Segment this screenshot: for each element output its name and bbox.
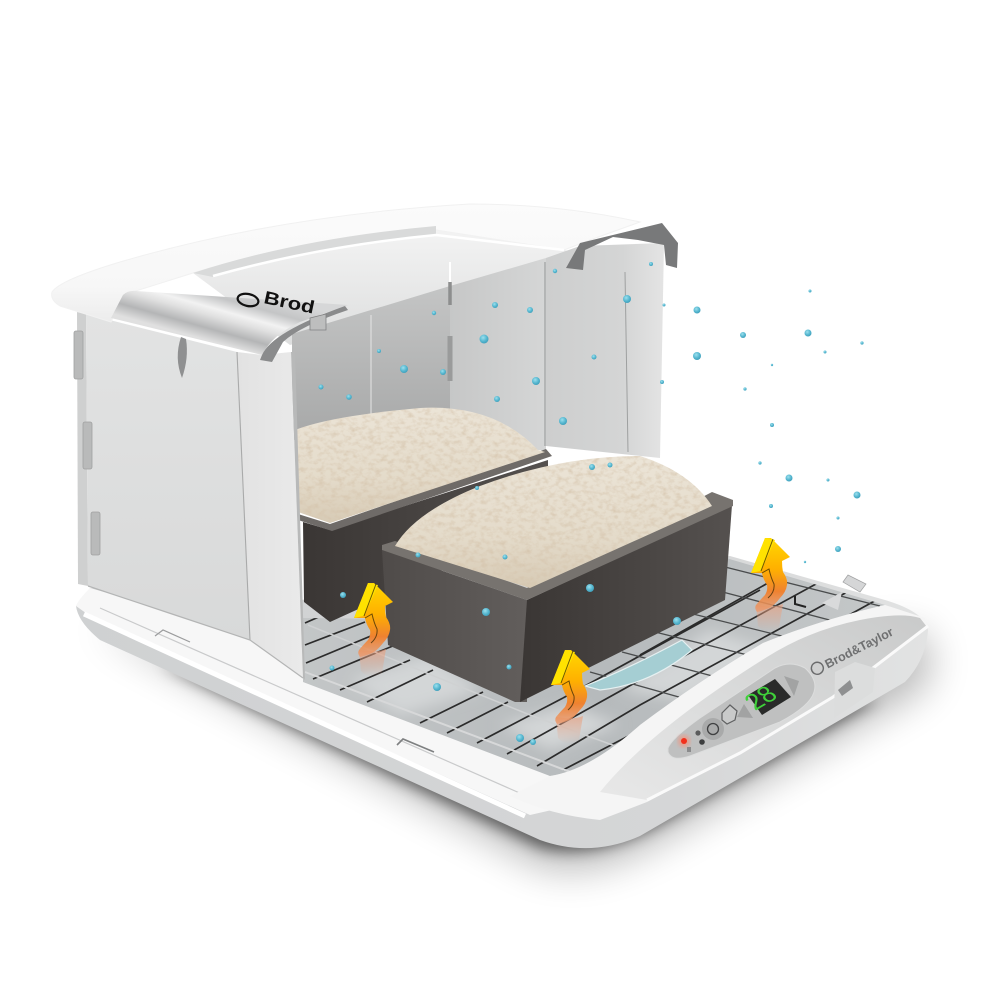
mode button [722, 705, 737, 724]
heat arrows [354, 538, 790, 744]
rear loaf pan [298, 449, 552, 622]
lid logo [236, 288, 316, 318]
power button [702, 718, 724, 740]
lid logo: Brod [262, 288, 316, 318]
front left wall [74, 312, 305, 680]
right lid bracket [566, 223, 678, 270]
lid top surface [52, 204, 640, 322]
hinge insert [834, 662, 875, 718]
grey top panel [600, 615, 927, 800]
side hinges [74, 331, 83, 379]
wall seams and hinges [371, 262, 628, 452]
wire rack over floor [303, 558, 884, 776]
control body [510, 605, 928, 820]
back wall: left panel [292, 286, 450, 440]
back wall: middle panel [450, 258, 546, 450]
digital display: 28 [739, 682, 783, 715]
front loaf pan [382, 492, 733, 702]
lid [52, 204, 678, 362]
lid window strip [193, 226, 436, 277]
tray base [76, 556, 928, 848]
control panel [668, 664, 815, 758]
rack clips and knob [795, 575, 866, 610]
front loaf [395, 456, 712, 588]
silver front band [111, 291, 348, 355]
minus button [737, 704, 753, 718]
brand logo on body: Brod&Taylor [823, 625, 896, 671]
rear loaf [297, 408, 545, 523]
plus button [784, 676, 799, 696]
steam droplets [318, 262, 864, 745]
latch [178, 337, 187, 378]
white rim [510, 605, 928, 820]
water tray [585, 640, 692, 690]
side wall: right panel [546, 243, 664, 458]
floor shadow [95, 625, 931, 869]
back wall: window area [193, 230, 590, 345]
indicator lights [678, 730, 705, 752]
band end bracket [260, 306, 348, 362]
illustration: bread proofer with two loaves [51, 204, 950, 890]
